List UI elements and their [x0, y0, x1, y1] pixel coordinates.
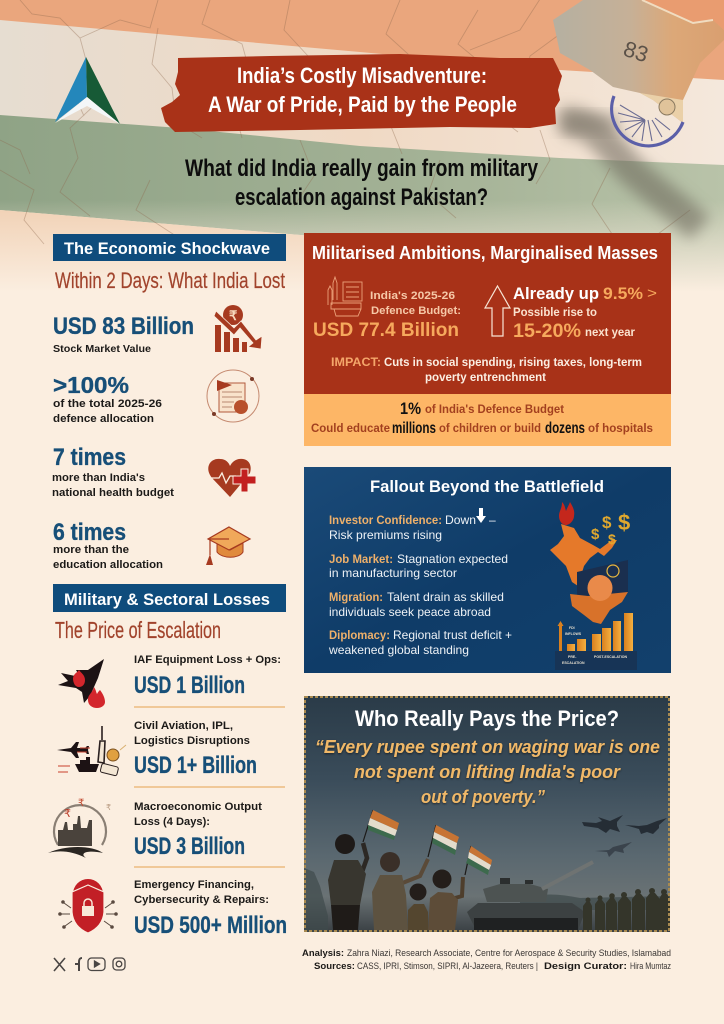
icon: budget and missiles [328, 277, 362, 316]
icon: burning jet [58, 659, 105, 708]
subtitle question: escalation against Pakistan? [235, 184, 488, 211]
panel: economic shockwave [52, 234, 286, 571]
panel: fallout beyond the battlefield: Fallout Beyond the Battlefield [370, 477, 604, 496]
panel: fallout beyond the battlefield: in manufacturing sector [329, 566, 457, 580]
credits: Design Curator: [544, 961, 627, 972]
icon: falling chart: ₹ [229, 308, 238, 323]
panel: militarised ambitions: > [647, 285, 657, 302]
panel: fallout beyond the battlefield: Talent drain as skilled [387, 590, 504, 604]
icon: down arrow [476, 508, 486, 523]
panel: militarised ambitions: India's 2025-26 [370, 290, 455, 302]
callout: one percent of the defence budget: dozens [545, 420, 585, 437]
callout: one percent of the defence budget [304, 394, 671, 446]
icon: aviation, cricket and shipping [57, 726, 126, 776]
credits: Sources: [314, 961, 355, 972]
panel: militarised ambitions: next year [585, 327, 636, 339]
image: torn map with budget figure and chakra: 83 [620, 36, 651, 67]
panel: fallout beyond the battlefield: Regional trust deficit + [393, 628, 512, 642]
panel: economic shockwave: defence allocation [53, 413, 154, 425]
panel: fallout beyond the battlefield: individuals seek peace abroad [329, 605, 491, 619]
panel: economic shockwave: more than India's [52, 472, 145, 484]
panel: fallout beyond the battlefield: Job Market: [329, 552, 393, 566]
panel: military and sectoral losses: Military & Sectoral Losses [64, 591, 270, 609]
chart: FDI inflows bars: PRE- [568, 655, 577, 659]
panel: economic shockwave: 6 times [53, 519, 126, 546]
chart: FDI inflows bars: FDI [569, 626, 575, 630]
panel: who really pays the price: “Every rupee spent on waging war is one [315, 737, 660, 757]
credits: Hira Mumtaz [630, 961, 671, 972]
arrow: upward budget rise [485, 286, 510, 336]
image: torn map with budget figure and chakra [553, 0, 724, 228]
panel: military and sectoral losses: IAF Equipment Loss + Ops: [134, 654, 281, 666]
chart: FDI inflows bars: INFLOWS [565, 632, 582, 636]
icon: graduation cap [206, 527, 250, 565]
title ribbon [161, 54, 562, 132]
icon: cyber shield [58, 879, 118, 933]
panel: fallout beyond the battlefield: Migration: [329, 590, 383, 604]
panel: military and sectoral losses: The Price of Escalation [55, 617, 221, 643]
panel: military and sectoral losses: USD 1+ Billion [134, 752, 257, 779]
subtitle question: What did India really gain from military [185, 155, 539, 182]
icon: factory and output loss [48, 798, 111, 858]
panel: economic shockwave: Stock Market Value [53, 343, 151, 355]
callout: one percent of the defence budget: 1% [400, 399, 421, 418]
image: India map with flames, brain and dollars: $ [618, 510, 630, 535]
callout: one percent of the defence budget: of children or build [439, 423, 541, 435]
panel: economic shockwave: more than the [53, 544, 129, 556]
panel: militarised ambitions: Cuts in social spending, rising taxes, long-term [384, 357, 642, 369]
panel: military and sectoral losses: Loss (4 Days): [134, 816, 210, 828]
panel: militarised ambitions: Already up [513, 284, 599, 303]
panel: militarised ambitions: IMPACT: [331, 357, 381, 369]
image: fighter jets [582, 815, 667, 857]
panel: militarised ambitions: 15-20% [513, 320, 581, 342]
panel: military and sectoral losses: USD 500+ Million [134, 912, 287, 939]
image: tank [467, 862, 593, 930]
logo [55, 57, 120, 124]
image: India map with flames, brain and dollars: $ [608, 531, 616, 547]
icon: factory and output loss: ₹ [78, 798, 84, 809]
panel: military and sectoral losses: USD 1 Billion [134, 672, 245, 699]
panel: militarised ambitions: poverty entrenchment [425, 372, 546, 384]
callout: one percent of the defence budget: of India's Defence Budget [425, 404, 564, 416]
panel: economic shockwave: education allocation [53, 559, 163, 571]
subtitle question [185, 155, 539, 211]
panel: economic shockwave: 7 times [53, 444, 126, 471]
panel: military and sectoral losses: Emergency Financing, [134, 879, 254, 891]
panel: militarised ambitions [304, 233, 671, 394]
panel: fallout beyond the battlefield: Down [445, 513, 476, 527]
icon: heart with cross [208, 459, 256, 497]
panel: military and sectoral losses [48, 584, 287, 939]
panel: militarised ambitions: Possible rise to [513, 307, 597, 319]
icon: falling chart [214, 305, 262, 352]
chart: FDI inflows bars: ESCALATION [562, 661, 585, 665]
title ribbon: India’s Costly Misadventure: [237, 63, 487, 88]
panel: who really pays the price: not spent on lifting India's poor [354, 762, 621, 782]
panel: economic shockwave: national health budget [52, 487, 174, 499]
icon: budget document [207, 370, 259, 422]
panel: militarised ambitions: 9.5% [603, 284, 643, 303]
image: distant treeline and hills [304, 868, 670, 932]
panel: who really pays the price [304, 696, 670, 932]
panel: economic shockwave: Within 2 Days: What India Lost [55, 268, 285, 293]
panel: fallout beyond the battlefield: Risk premiums rising [329, 528, 442, 542]
callout: one percent of the defence budget: of hospitals [588, 423, 653, 435]
chart: FDI inflows bars [555, 613, 637, 670]
panel: military and sectoral losses: Cybersecurity & Repairs: [134, 894, 269, 906]
image: India map with flames, brain and dollars [550, 502, 630, 624]
callout: one percent of the defence budget: Could educate [311, 423, 390, 435]
panel: fallout beyond the battlefield: – [489, 513, 496, 527]
panel: who really pays the price: out of poverty.” [421, 787, 545, 807]
image: India map with flames, brain and dollars: $ [602, 513, 612, 532]
panel: militarised ambitions: Defence Budget: [371, 305, 461, 317]
image: India map with flames, brain and dollars: $ [591, 526, 600, 543]
panel: military and sectoral losses: USD 3 Billion [134, 833, 245, 860]
title ribbon: A War of Pride, Paid by the People [208, 92, 517, 117]
callout: one percent of the defence budget: millions [392, 420, 436, 437]
image: marching soldiers [583, 888, 670, 930]
panel: fallout beyond the battlefield: Diplomacy: [329, 628, 390, 642]
image: children with flags [328, 810, 492, 930]
credits: Analysis: [302, 948, 344, 959]
panel: militarised ambitions: Militarised Ambitions, Marginalised Masses [312, 243, 658, 263]
panel: fallout beyond the battlefield: Stagnation expected [397, 552, 508, 566]
panel: fallout beyond the battlefield: weakened global standing [328, 643, 469, 657]
icon: factory and output loss: ₹ [106, 803, 111, 812]
credits: Zahra Niazi, Research Associate, Centre for Aerospace & Security Studies, Islamabad [347, 948, 671, 959]
panel: fallout beyond the battlefield [304, 467, 671, 673]
credits [302, 948, 671, 972]
icon: factory and output loss: ₹ [64, 808, 71, 820]
panel: military and sectoral losses: Logistics Disruptions [134, 735, 250, 747]
panel: militarised ambitions: USD 77.4 Billion [313, 319, 459, 341]
panel: military and sectoral losses: Macroeconomic Output [134, 801, 262, 813]
panel: economic shockwave: of the total 2025-26 [53, 398, 162, 410]
credits: CASS, IPRI, Stimson, SIPRI, Al-Jazeera, Reuters | [357, 961, 538, 972]
panel: economic shockwave: USD 83 Billion [53, 313, 194, 340]
panel: military and sectoral losses: Civil Aviation, IPL, [134, 720, 233, 732]
panel: economic shockwave: The Economic Shockwave [64, 240, 270, 258]
panel: who really pays the price: Who Really Pays the Price? [355, 706, 619, 731]
social media icons [54, 958, 125, 971]
panel: economic shockwave: >100% [53, 372, 129, 398]
panel: fallout beyond the battlefield: Investor Confidence: [329, 513, 442, 527]
chart: FDI inflows bars: POST-ESCALATION [594, 655, 627, 659]
